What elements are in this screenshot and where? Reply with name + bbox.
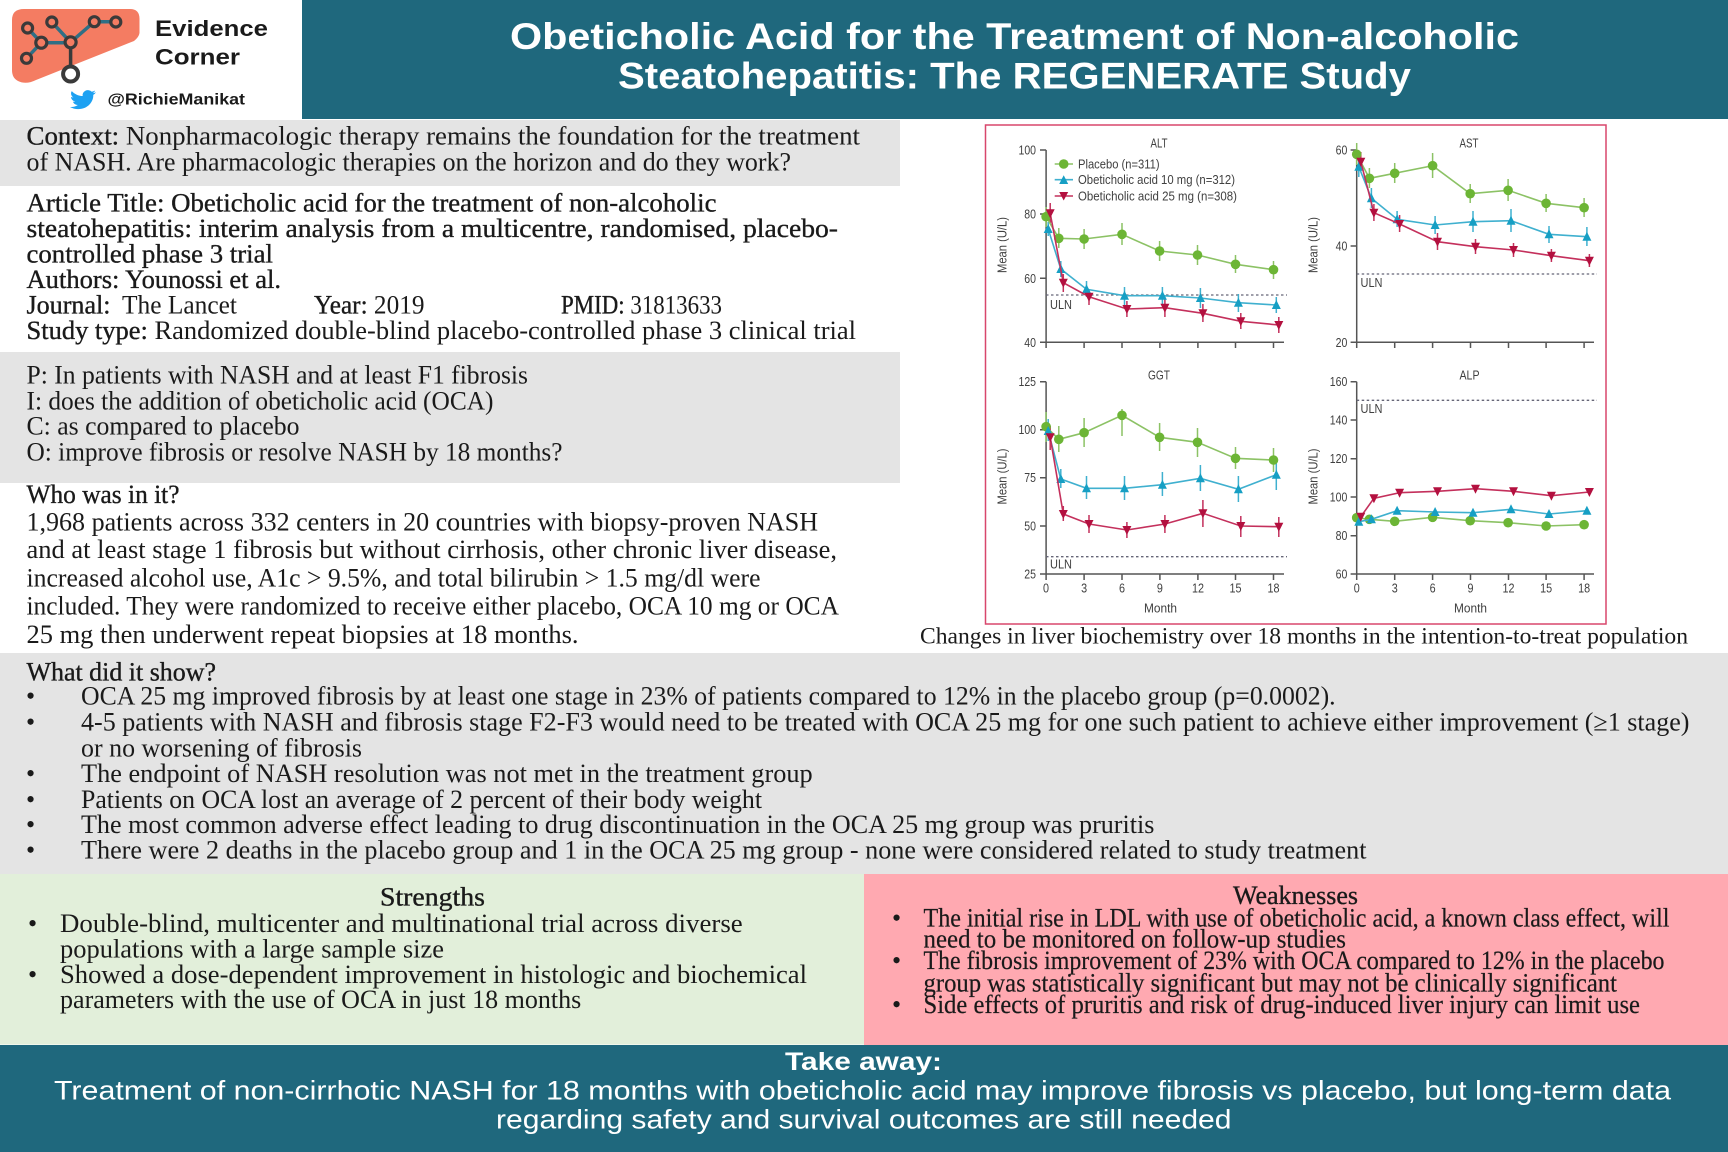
- chart: ALT: 100: [1018, 142, 1036, 158]
- chart: ALP: 80: [1336, 528, 1347, 543]
- panel: who was in it: [26, 480, 839, 649]
- chart: ALP: 9: [1468, 580, 1474, 596]
- chart: AST: 20: [1336, 335, 1347, 350]
- panel: article details: Authors: Younossi et al.: [26, 265, 281, 294]
- panel: what did it show: or no worsening of fibrosis: [81, 733, 362, 762]
- panel: strengths: Double-blind, multicenter and multinational trial across diverse: [60, 909, 743, 938]
- panel: take away: [0, 1045, 1728, 1152]
- chart: ALP: 120: [1330, 451, 1347, 466]
- panel: what did it show: Patients on OCA lost an average of 2 percent of their body weight: [81, 785, 763, 814]
- panel: what did it show: There were 2 deaths in the placebo group and 1 in the OCA 25 mg group - none were considered related to study treatment: [81, 836, 1367, 865]
- panel: article details: Journal:: [26, 291, 110, 320]
- panel: article details: [26, 188, 856, 345]
- chart: GGT: 12: [1192, 580, 1204, 596]
- chart: ALP: Month: [1454, 600, 1487, 616]
- panel: PICO question: I: does the addition of obeticholic acid (OCA): [26, 387, 494, 416]
- legend: Obeticholic acid 25 mg (n=308): [1078, 188, 1237, 204]
- panel: what did it show: [0, 653, 1728, 874]
- panel: weaknesses: The initial rise in LDL with use of obeticholic acid, a known class effect, will: [924, 903, 1670, 932]
- panel: PICO question: P: In patients with NASH and at least F1 fibrosis: [26, 361, 528, 390]
- panel: context: [0, 120, 900, 186]
- chart: ALP: 15: [1540, 580, 1552, 596]
- panel: who was in it: and at least stage 1 fibrosis but without cirrhosis, other chronic liver disease,: [26, 535, 837, 564]
- panel: what did it show: •: [26, 785, 35, 814]
- panel: what did it show: •: [26, 708, 35, 737]
- panel: strengths: Strengths: [380, 883, 485, 912]
- chart: ALP: 3: [1392, 580, 1398, 596]
- chart: ALP: 0: [1354, 580, 1360, 596]
- panel: weaknesses: group was statistically significant but may not be clinically significant: [924, 968, 1618, 997]
- chart: ALP: Mean (U/L): [1306, 448, 1320, 504]
- panel: article details: Study type: Randomized double-blind placebo-controlled phase 3 clinical trial: [26, 316, 856, 345]
- panel: who was in it: 1,968 patients across 332 centers in 20 countries with biopsy-proven NASH: [26, 507, 818, 536]
- panel: what did it show: The most common adverse effect leading to drug discontinuation in the OCA 25 mg group was pruritis: [81, 810, 1154, 839]
- chart: GGT: ULN: [1050, 556, 1072, 572]
- chart: AST: 60: [1336, 142, 1347, 158]
- chart: GGT: 50: [1024, 518, 1036, 534]
- panel: weaknesses: •: [892, 903, 901, 932]
- panel: who was in it: 25 mg then underwent repeat biopsies at 18 months.: [26, 620, 578, 649]
- panel: weaknesses: •: [892, 946, 901, 975]
- panel: article details: Year: 2019: [314, 291, 424, 320]
- panel: context: of NASH. Are pharmacologic therapies on the horizon and do they work?: [26, 148, 791, 177]
- panel: strengths: [0, 874, 864, 1044]
- brand name: Evidence: [155, 16, 268, 41]
- chart: ALT: 80: [1024, 206, 1036, 222]
- legend: Obeticholic acid 10 mg (n=312): [1078, 172, 1235, 187]
- panel: who was in it: increased alcohol use, A1c > 9.5%, and total bilirubin > 1.5 mg/dl were: [26, 564, 760, 593]
- panel: what did it show: The endpoint of NASH resolution was not met in the treatment group: [81, 759, 813, 788]
- icon: twitter bird: [70, 90, 96, 109]
- chart: ALT: ULN: [1050, 297, 1072, 312]
- chart: GGT: 9: [1157, 580, 1163, 596]
- panel: what did it show: •: [26, 810, 35, 839]
- panel: weaknesses: need to be monitored on follow-up studies: [924, 924, 1346, 953]
- panel: what did it show: •: [26, 682, 35, 711]
- panel: weaknesses: [864, 874, 1728, 1045]
- chart caption: Changes in liver biochemistry over 18 months in the intention-to-treat population: [920, 623, 1689, 648]
- panel: take away: regarding safety and survival outcomes are still needed: [496, 1104, 1232, 1134]
- title banner: Obeticholic Acid for the Treatment of Non-alcoholic: [510, 16, 1519, 57]
- chart: GGT: 15: [1230, 580, 1242, 596]
- panel: weaknesses: •: [892, 990, 901, 1019]
- title banner: Steatohepatitis: The REGENERATE Study: [618, 56, 1411, 96]
- panel: strengths: parameters with the use of OCA in just 18 months: [60, 985, 581, 1014]
- panel: who was in it: Who was in it?: [26, 480, 180, 509]
- chart: ALT: 40: [1024, 335, 1036, 350]
- chart: AST: AST: [1460, 136, 1479, 150]
- panel: what did it show: 4-5 patients with NASH and fibrosis stage F2-F3 would need to be treated with OCA 25 mg for one such patient to achieve either improvement (≥1 stage): [81, 708, 1690, 737]
- chart: GGT: 125: [1018, 374, 1036, 389]
- chart: GGT: 25: [1024, 566, 1036, 582]
- panel: strengths: Showed a dose-dependent improvement in histologic and biochemical: [60, 960, 807, 989]
- chart: ALT: ALT: [1150, 136, 1168, 150]
- brand name: [155, 16, 268, 70]
- panel: PICO question: [0, 352, 900, 483]
- panel: weaknesses: Weaknesses: [1233, 881, 1358, 910]
- chart: ALP: 100: [1330, 490, 1347, 504]
- chart: GGT: 100: [1018, 422, 1036, 437]
- chart: AST: ULN: [1360, 275, 1382, 290]
- title banner: [302, 0, 1728, 119]
- chart: ALP: ULN: [1360, 401, 1382, 416]
- panel: take away: Treatment of non-cirrhotic NASH for 18 months with obeticholic acid may improve fibrosis vs placebo, but long-term data: [54, 1076, 1671, 1106]
- icon: liver with molecule: [12, 9, 140, 83]
- chart: GGT: 3: [1081, 580, 1087, 596]
- chart: GGT: 75: [1024, 470, 1036, 485]
- chart: ALP: 160: [1330, 374, 1347, 389]
- panel: strengths: populations with a large sample size: [60, 934, 444, 963]
- chart: GGT: 0: [1043, 580, 1049, 596]
- panel: what did it show: •: [26, 836, 35, 865]
- chart: ALP: [1306, 368, 1597, 616]
- chart: ALP: 140: [1330, 412, 1347, 428]
- panel: PICO question: C: as compared to placebo: [26, 412, 300, 441]
- panel: article details: PMID: 31813633: [561, 291, 722, 320]
- panel: PICO question: O: improve fibrosis or resolve NASH by 18 months?: [26, 438, 562, 467]
- legend: [1055, 156, 1237, 204]
- chart: GGT: 18: [1268, 580, 1280, 596]
- chart: GGT: [994, 368, 1287, 616]
- panel: weaknesses: Side effects of pruritis and risk of drug-induced liver injury can limit use: [924, 990, 1640, 1019]
- panel: article details: steatohepatitis: interim analysis from a multicentre, randomised, placebo-: [26, 214, 838, 243]
- logo: Evidence Corner: [12, 9, 268, 109]
- panel: weaknesses: The fibrosis improvement of 23% with OCA compared to 12% in the placebo: [924, 946, 1664, 975]
- panel: who was in it: included. They were randomized to receive either placebo, OCA 10 mg or OCA: [26, 592, 839, 621]
- chart: AST: Mean (U/L): [1306, 217, 1320, 273]
- chart: ALP: 60: [1336, 566, 1347, 582]
- panel: article details: The Lancet: [122, 291, 238, 320]
- chart: GGT: 6: [1119, 580, 1125, 596]
- panel: strengths: •: [28, 909, 37, 938]
- panel: article details: Article Title: Obeticholic acid for the treatment of non-alcoholic: [26, 188, 716, 217]
- chart: ALT: 60: [1024, 271, 1036, 286]
- chart: ALT: [994, 136, 1287, 350]
- chart figure: liver biochemistry over 18 months: [986, 125, 1606, 624]
- twitter handle: @RichieManikat: [108, 92, 246, 108]
- panel: take away: Take away:: [785, 1048, 942, 1076]
- panel: what did it show: What did it show?: [26, 657, 216, 686]
- chart: ALP: 12: [1502, 580, 1514, 596]
- chart: AST: 40: [1336, 238, 1347, 254]
- panel: article details: controlled phase 3 trial: [26, 239, 273, 268]
- panel: context: Context: Nonpharmacologic therapy remains the foundation for the treatment: [26, 122, 861, 151]
- panel: what did it show: •: [26, 759, 35, 788]
- chart: AST: [1306, 136, 1597, 350]
- chart: GGT: Month: [1144, 600, 1177, 616]
- chart: ALT: Mean (U/L): [994, 217, 1010, 273]
- chart: GGT: GGT: [1148, 368, 1170, 382]
- chart: ALP: 6: [1430, 580, 1436, 596]
- legend: Placebo (n=311): [1078, 156, 1160, 172]
- chart: ALP: ALP: [1460, 368, 1480, 382]
- panel: what did it show: OCA 25 mg improved fibrosis by at least one stage in 23% of patients compared to 12% in the placebo group (p=0.0002).: [81, 682, 1336, 711]
- brand name: Corner: [155, 44, 241, 70]
- chart: ALP: 18: [1578, 580, 1590, 596]
- panel: strengths: •: [28, 960, 37, 989]
- chart: GGT: Mean (U/L): [994, 448, 1010, 504]
